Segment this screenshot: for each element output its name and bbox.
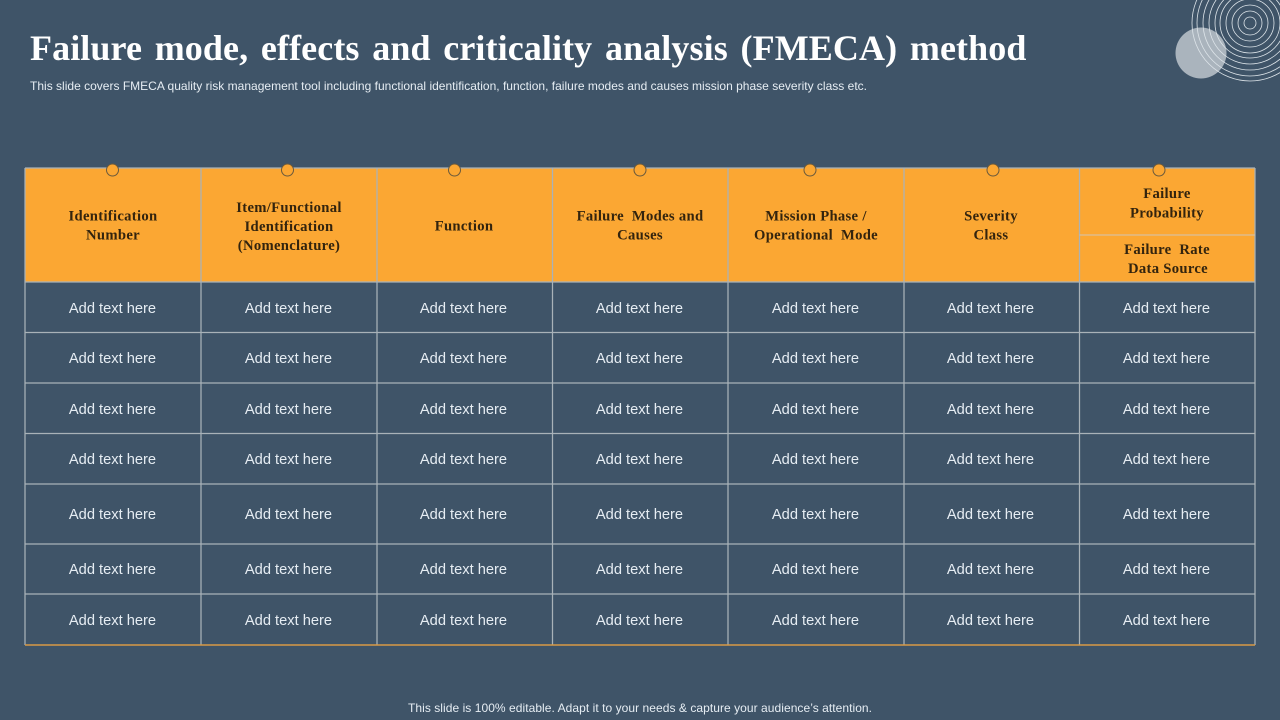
row 5: Add text here	[245, 507, 332, 523]
row 3: Add text here	[1123, 402, 1210, 418]
row 4: Add text here	[596, 452, 683, 468]
row 7: Add text here	[1123, 613, 1210, 629]
row 6: Add text here	[69, 562, 156, 578]
row 4: Add text here	[947, 452, 1034, 468]
row 6: Add text here	[772, 562, 859, 578]
row 3: Add text here	[420, 402, 507, 418]
row 3	[69, 402, 1210, 418]
header labels: Failure Modes and	[577, 208, 703, 224]
row 2: Add text here	[245, 351, 332, 367]
row 1: Add text here	[947, 301, 1034, 317]
row 6: Add text here	[245, 562, 332, 578]
row 4: Add text here	[1123, 452, 1210, 468]
row 5: Add text here	[69, 507, 156, 523]
row 2: Add text here	[69, 351, 156, 367]
row 5: Add text here	[947, 507, 1034, 523]
row 7: Add text here	[245, 613, 332, 629]
row 5: Add text here	[596, 507, 683, 523]
table rows	[69, 301, 1210, 629]
row 1: Add text here	[772, 301, 859, 317]
row 4: Add text here	[420, 452, 507, 468]
icon: decorative circles	[1176, 0, 1280, 81]
header labels: Data Source	[1128, 261, 1208, 277]
subtitle: This slide covers FMECA quality risk management tool including functional identification, function, failure modes and causes mission phase severity class etc.	[30, 79, 867, 93]
header labels: Item/Functional	[236, 200, 342, 216]
row 4: Add text here	[245, 452, 332, 468]
row 2: Add text here	[772, 351, 859, 367]
table header background	[25, 168, 1255, 282]
row 1: Add text here	[596, 301, 683, 317]
header labels: Number	[86, 228, 140, 244]
row 4	[69, 452, 1210, 468]
header labels: Operational Mode	[754, 228, 878, 244]
row 3: Add text here	[69, 402, 156, 418]
row 2: Add text here	[947, 351, 1034, 367]
row 1: Add text here	[420, 301, 507, 317]
header markers	[106, 164, 1165, 176]
header labels: Severity	[964, 208, 1018, 224]
row 6: Add text here	[420, 562, 507, 578]
header labels: Failure Rate	[1124, 242, 1210, 258]
header labels: Failure	[1143, 186, 1191, 202]
table	[25, 164, 1255, 645]
title: Failure mode, effects and criticality analysis (FMECA) method	[30, 28, 1026, 68]
row 7: Add text here	[420, 613, 507, 629]
row 3: Add text here	[596, 402, 683, 418]
row 2: Add text here	[1123, 351, 1210, 367]
row 5: Add text here	[420, 507, 507, 523]
row 3: Add text here	[947, 402, 1034, 418]
header labels: Identification	[69, 208, 157, 224]
row 7: Add text here	[596, 613, 683, 629]
row 6: Add text here	[596, 562, 683, 578]
header labels: Class	[974, 228, 1008, 244]
row 1: Add text here	[69, 301, 156, 317]
row 6: Add text here	[1123, 562, 1210, 578]
row 1: Add text here	[245, 301, 332, 317]
row 1	[69, 301, 1210, 317]
row 5: Add text here	[1123, 507, 1210, 523]
row 5: Add text here	[772, 507, 859, 523]
header labels: Identification	[245, 219, 333, 235]
row 4: Add text here	[772, 452, 859, 468]
row 1: Add text here	[1123, 301, 1210, 317]
row 5	[69, 507, 1210, 523]
header labels	[69, 186, 1210, 277]
row 6: Add text here	[947, 562, 1034, 578]
row 7: Add text here	[772, 613, 859, 629]
row 7	[69, 613, 1210, 629]
row 6	[69, 562, 1210, 578]
row 2: Add text here	[596, 351, 683, 367]
header labels: Function	[435, 218, 493, 234]
header labels: Probability	[1130, 206, 1204, 222]
row 3: Add text here	[245, 402, 332, 418]
header labels: (Nomenclature)	[238, 238, 340, 254]
header labels: Mission Phase /	[765, 208, 867, 224]
row 7: Add text here	[69, 613, 156, 629]
row 2: Add text here	[420, 351, 507, 367]
row 3: Add text here	[772, 402, 859, 418]
row 2	[69, 351, 1210, 367]
footer note: This slide is 100% editable. Adapt it to your needs & capture your audience’s attention.	[408, 701, 872, 715]
row 7: Add text here	[947, 613, 1034, 629]
row 4: Add text here	[69, 452, 156, 468]
header labels: Causes	[617, 228, 663, 244]
